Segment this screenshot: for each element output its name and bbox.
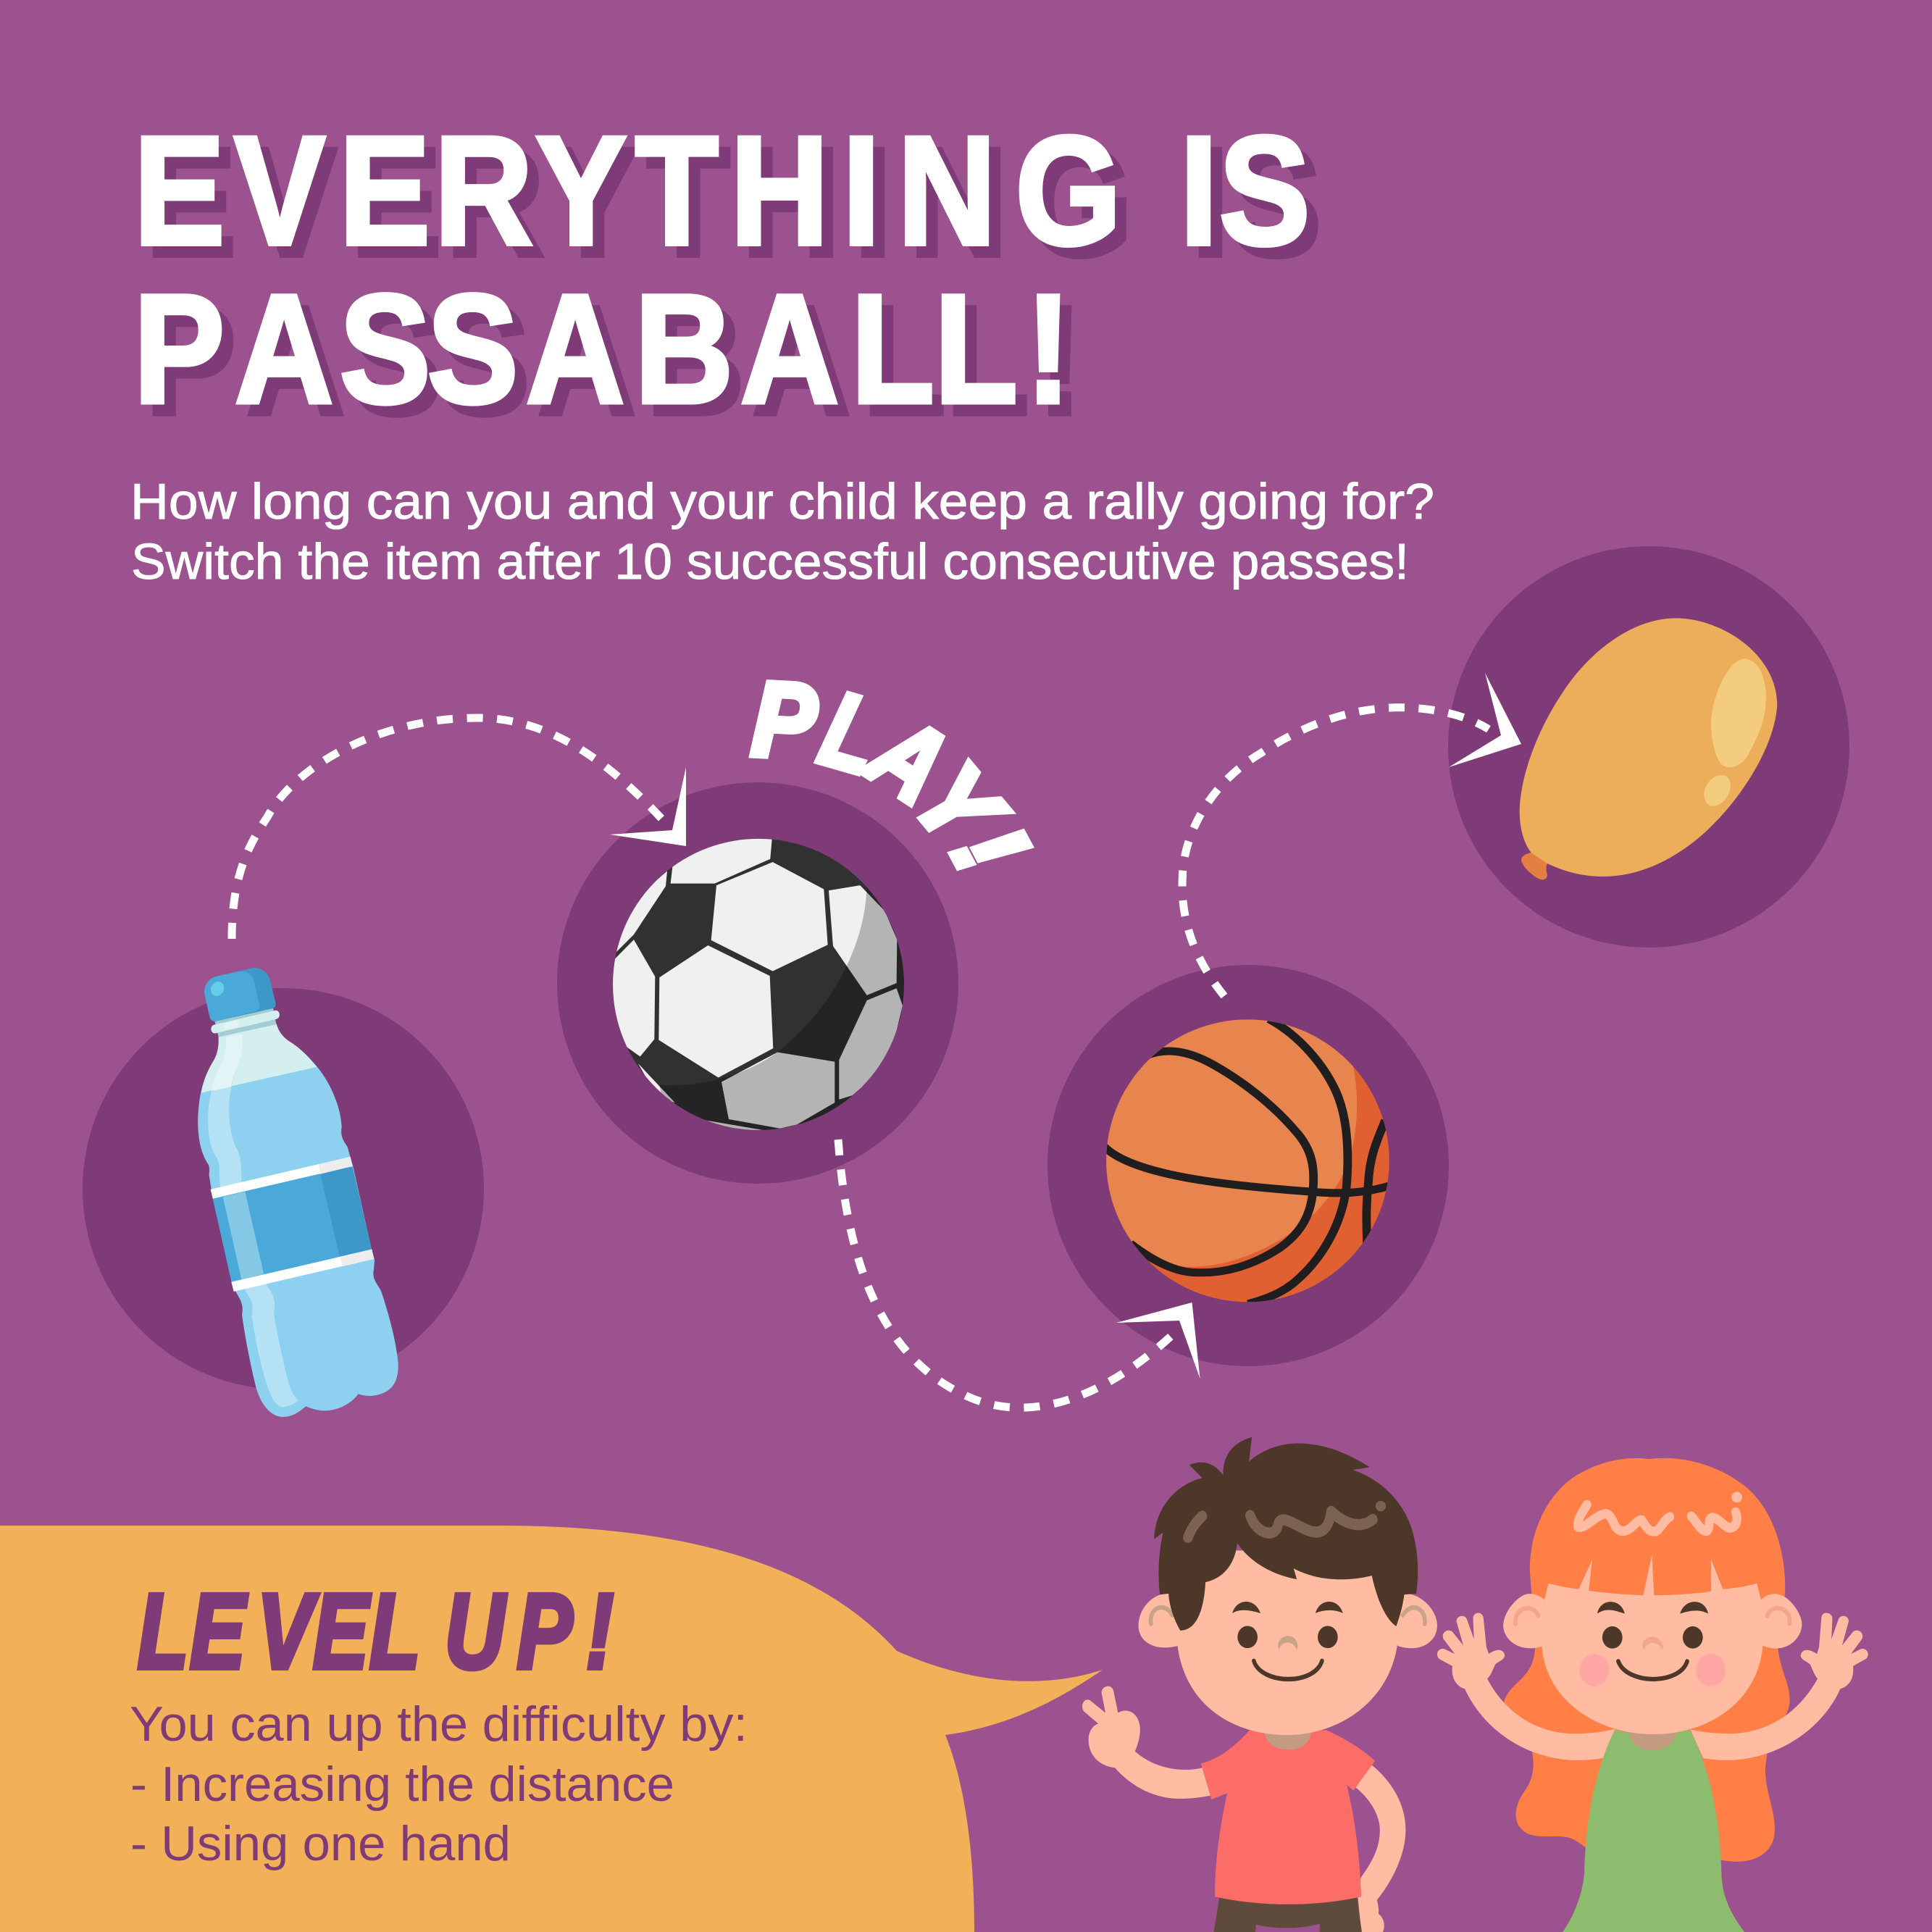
- intro text: How long can you and your child keep a rally going for?: [130, 473, 1434, 530]
- title: EVERYTHING IS: [134, 104, 1310, 277]
- title: [134, 104, 1322, 447]
- level up text: - Increasing the distance: [130, 1757, 674, 1812]
- title: EVERYTHING IS: [146, 116, 1322, 289]
- illustration: boy: [1082, 1437, 1437, 1932]
- panel: balloon circle: [1448, 546, 1849, 948]
- PLAY! heading: !: [930, 806, 1050, 892]
- title: PASSABALL!: [134, 262, 1071, 435]
- intro text: Switch the item after 10 successful consecutive passes!: [131, 533, 1409, 590]
- icon: water bottle: [198, 968, 398, 1417]
- intro text: [130, 473, 1434, 590]
- panel: speech bubble: [0, 1526, 1103, 1932]
- level up text: - Using one hand: [130, 1816, 511, 1871]
- icon: balloon: [1520, 618, 1777, 879]
- title: PASSABALL!: [146, 274, 1083, 447]
- illustration: girl: [1437, 1458, 1868, 1932]
- level up text: [130, 1697, 748, 1871]
- PLAY! heading: P: [749, 660, 819, 781]
- panel: basketball circle: [1047, 965, 1449, 1366]
- PLAY! heading: L: [809, 669, 892, 797]
- arrow: soccer ball to basketball: [838, 1139, 1200, 1408]
- heading: level up: LEVEL UP!: [138, 1572, 614, 1691]
- level up text: You can up the difficulty by:: [130, 1697, 748, 1752]
- panel: bottle circle: [83, 988, 484, 1389]
- arrow: bottle to soccer ball: [232, 718, 686, 939]
- panel: soccer ball circle: [557, 782, 958, 1184]
- PLAY! heading: A: [848, 690, 969, 827]
- icon: basketball: [1106, 1019, 1389, 1302]
- PLAY! heading: [749, 660, 1050, 892]
- PLAY! heading: Y: [890, 741, 1028, 873]
- icon: soccer ball: [609, 836, 913, 1134]
- arrow: basketball to balloon: [1182, 673, 1521, 996]
